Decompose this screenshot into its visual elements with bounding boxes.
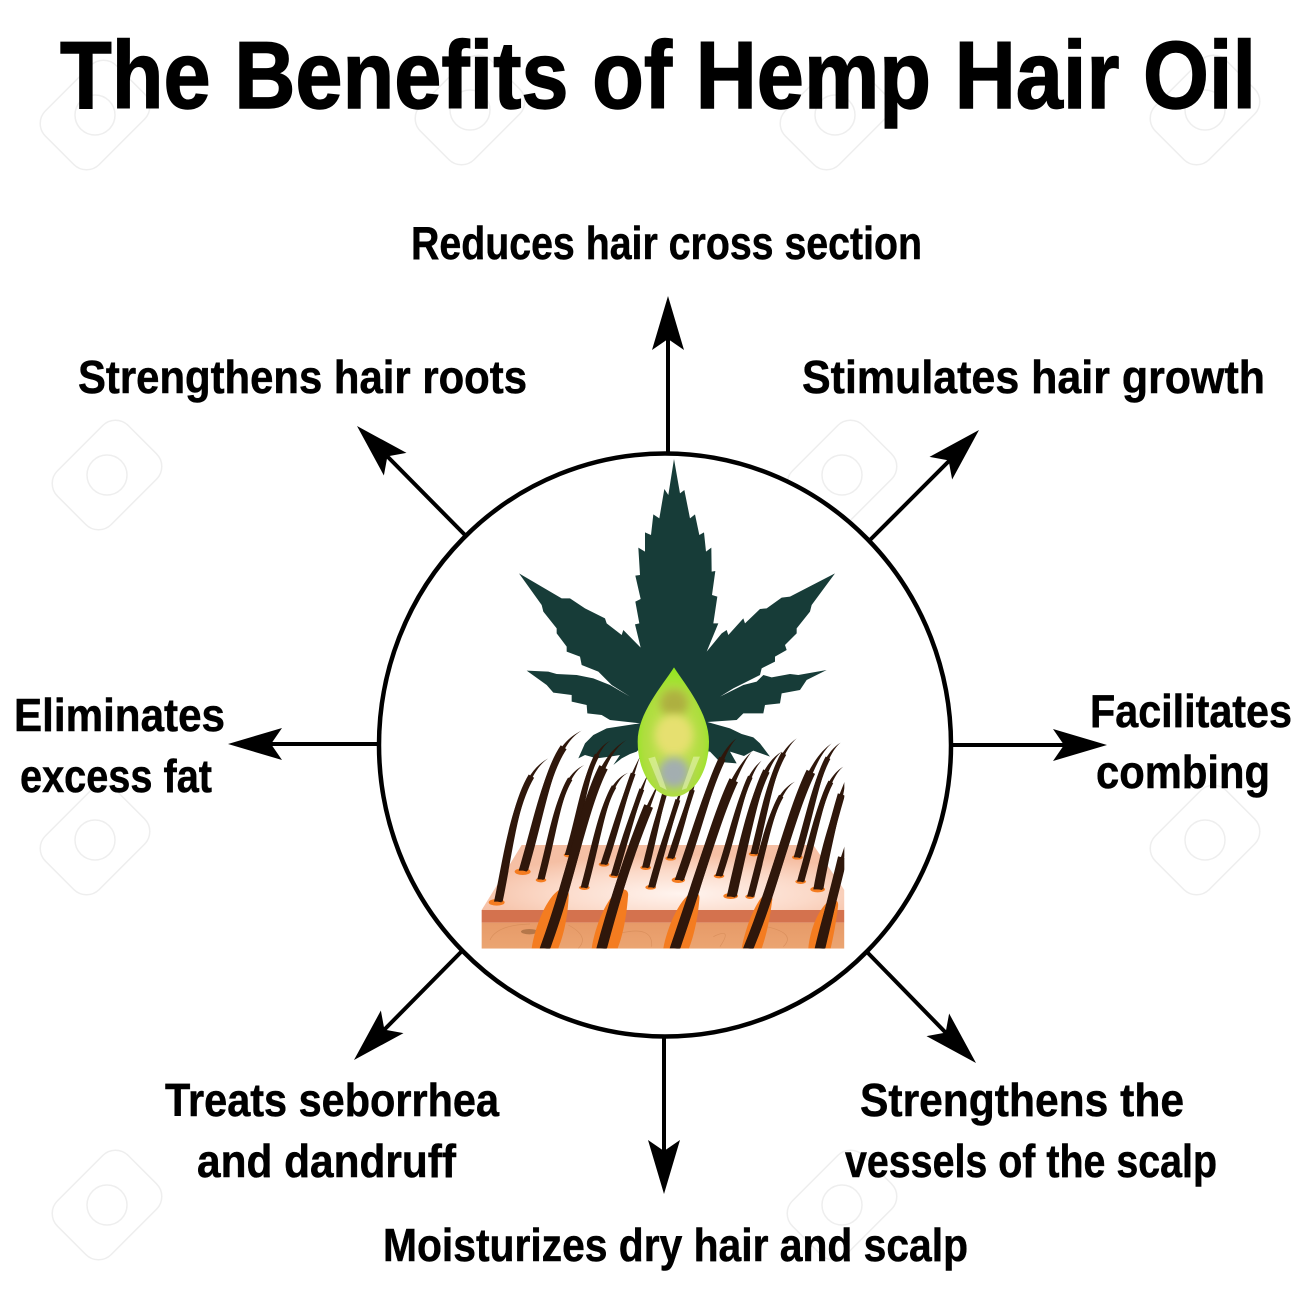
hair strands (494, 731, 847, 902)
label: moisturizes dry hair and scalp: Moisturizes dry hair and scalp (383, 1219, 968, 1271)
label: stimulates hair growth: Stimulates hair growth (802, 351, 1265, 403)
label: treats seborrhea and dandruff: Treats seborrhea (165, 1074, 499, 1126)
label: eliminates excess fat: excess fat (20, 750, 212, 802)
central circle (379, 454, 951, 1036)
label: eliminates excess fat (14, 689, 225, 802)
label: strengthens the vessels of the scalp: vessels of the scalp (845, 1135, 1217, 1187)
label: treats seborrhea and dandruff (165, 1074, 499, 1187)
icon: oil drop (638, 667, 709, 797)
arrow: right (952, 729, 1107, 761)
arrow: lower left (343, 952, 461, 1071)
illustration: leaf, hair and oil drop (482, 459, 847, 949)
label: strengthens hair roots: Strengthens hair roots (78, 351, 527, 403)
label: strengthens the vessels of the scalp: Strengthens the (860, 1074, 1184, 1126)
label: treats seborrhea and dandruff: and dandruff (197, 1135, 457, 1187)
front hair strands (540, 740, 847, 948)
arrow: up (652, 296, 684, 452)
arrow: upper left (346, 415, 465, 535)
hair follicles (489, 852, 825, 906)
arrow: upper right (870, 419, 990, 540)
arrow: down (648, 1038, 680, 1194)
label: strengthens the vessels of the scalp (845, 1074, 1217, 1187)
label: facilitates combing: combing (1096, 746, 1270, 798)
arrow: left (228, 728, 377, 760)
skin block (482, 845, 844, 949)
hair and skin block (482, 731, 847, 949)
label: facilitates combing (1090, 685, 1292, 798)
icon: hemp leaf (519, 459, 835, 765)
label: eliminates excess fat: Eliminates (14, 689, 225, 741)
label: reduces hair cross section: Reduces hair cross section (411, 217, 922, 269)
orange hair sheaths (532, 889, 838, 948)
arrow: lower right (867, 952, 987, 1074)
